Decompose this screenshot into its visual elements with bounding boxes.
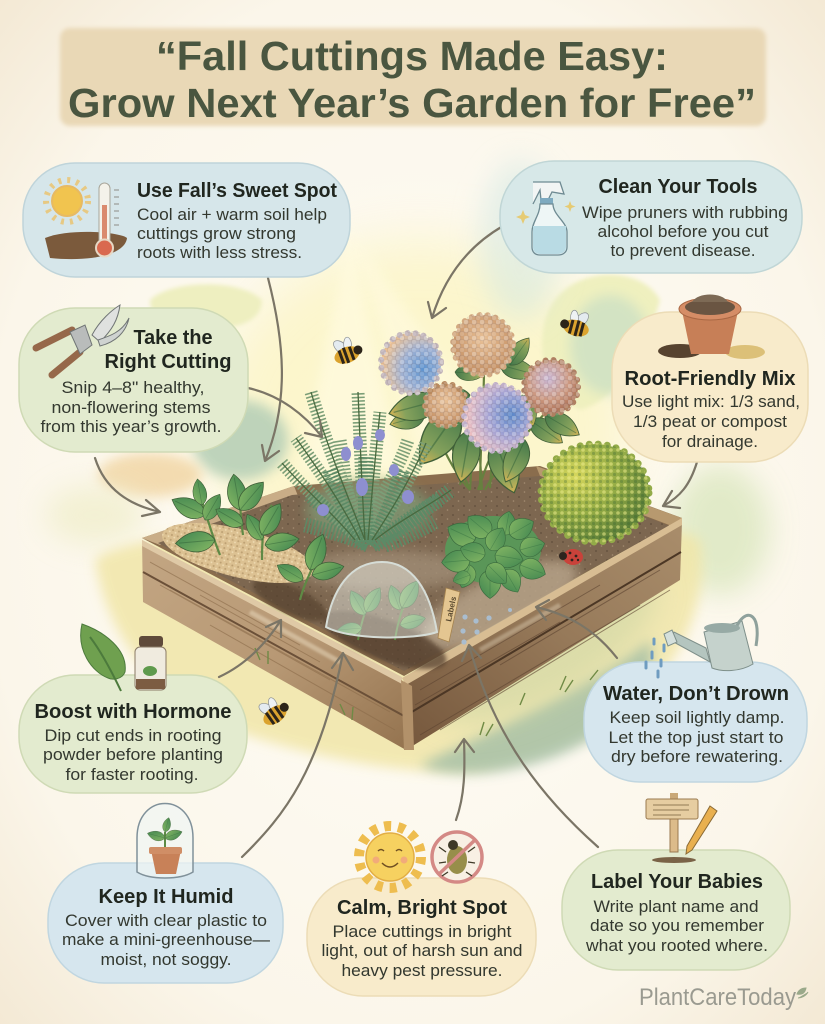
body text: alcohol before you cut [598, 222, 769, 241]
body text: Use light mix: 1/3 sand, [622, 392, 800, 411]
body text: Wipe pruners with rubbing [582, 203, 788, 222]
panel: keep it humid [48, 804, 283, 983]
body text [40, 378, 222, 436]
heading [104, 326, 232, 373]
body text: moist, not soggy. [100, 950, 232, 969]
title banner [60, 28, 766, 126]
heading: Clean Your Tools [598, 175, 758, 198]
body text: to prevent disease. [610, 241, 756, 260]
body text [322, 922, 522, 980]
hydrangea blooms [379, 313, 580, 453]
heading: Keep It Humid [98, 885, 234, 908]
logo: PlantCareToday: PlantCareToday [639, 984, 796, 1011]
panel: water, don't drown [584, 615, 807, 782]
icon: sun and thermometer in soil [45, 180, 127, 259]
heading: Label Your Babies [591, 870, 763, 893]
body text: cuttings grow strong [137, 224, 296, 243]
icon: smiling sun [359, 826, 421, 888]
body text: Write plant name and [594, 897, 758, 916]
bee 2 [558, 305, 594, 339]
front right wall [401, 518, 682, 750]
body text: 1/3 peat or compost [633, 412, 787, 431]
body text: Let the top just start to [608, 728, 784, 747]
body text [585, 897, 768, 955]
back rails [142, 466, 682, 676]
body text: dry before rewatering. [611, 747, 783, 766]
arrows [95, 226, 697, 857]
panel: calm, bright spot [307, 826, 536, 996]
body text: from this year’s growth. [40, 417, 222, 436]
bee 3 [253, 690, 293, 729]
body text: light, out of harsh sun and [322, 941, 522, 960]
body text: make a mini-greenhouse— [62, 930, 270, 949]
body text [608, 708, 784, 766]
plant label stake: Labels [444, 595, 458, 622]
title text [68, 33, 756, 126]
hydrangea plant [379, 313, 584, 498]
basil plant [441, 508, 549, 598]
body text: Keep soil lightly damp. [610, 708, 784, 727]
hydrangea foliage [386, 333, 584, 498]
body text [43, 726, 223, 784]
icon: wooden sign and pencil [646, 793, 717, 863]
heading: Root-Friendly Mix [624, 367, 796, 390]
boxwood shrub [540, 443, 650, 543]
body text: Dip cut ends in rooting [44, 726, 222, 745]
body text: what you rooted where. [585, 936, 768, 955]
panel: root-friendly mix [612, 294, 808, 462]
heading: Use Fall’s Sweet Spot [137, 179, 337, 202]
heading: Water, Don’t Drown [603, 682, 789, 705]
heading: Boost with Hormone [34, 700, 232, 723]
front left wall [142, 540, 406, 750]
body text: date so you remember [590, 916, 764, 935]
sand patch [157, 511, 319, 595]
body text: Snip 4–8" healthy, [62, 378, 204, 397]
raised garden bed [142, 466, 682, 750]
body text [62, 911, 270, 969]
grass tufts [255, 648, 598, 736]
body text [582, 203, 788, 260]
watercolor garden wash [45, 160, 770, 774]
body text: for faster rooting. [66, 765, 198, 784]
lavender blooms [317, 429, 414, 516]
panel: use fall's sweet spot [23, 163, 350, 277]
body text: Place cuttings in bright [332, 922, 512, 941]
plastic dome with seedlings [317, 562, 453, 681]
soil [158, 476, 670, 671]
icon: no pests symbol [432, 832, 482, 882]
water droplets [460, 608, 512, 645]
icon: spray bottle [516, 182, 576, 255]
icon: terracotta pot with soil [658, 294, 765, 359]
ladybug [559, 549, 583, 565]
panel: take the right cutting [19, 305, 248, 452]
title text: “Fall Cuttings Made Easy: [156, 33, 668, 79]
body text: heavy pest pressure. [342, 961, 502, 980]
body text [137, 205, 327, 262]
panel: label your babies [562, 793, 790, 970]
seedlings in sand [168, 473, 346, 600]
panel: boost with hormone [19, 624, 247, 793]
body text: roots with less stress. [137, 243, 302, 262]
body text: powder before planting [43, 745, 223, 764]
plant label stake [438, 588, 460, 642]
title text: Grow Next Year’s Garden for Free” [68, 80, 756, 126]
heading: Right Cutting [104, 350, 232, 373]
heading: Take the [134, 326, 212, 349]
icon: mini greenhouse dome [137, 804, 193, 878]
hydrangea stems [418, 370, 548, 490]
heading: Calm, Bright Spot [337, 896, 507, 919]
body text: non-flowering stems [52, 398, 210, 417]
body text [622, 392, 800, 451]
icon: leaf and rooting powder jar [81, 624, 166, 691]
bee 1 [328, 331, 365, 367]
rosemary plant [282, 392, 451, 545]
icon: watering can [646, 615, 757, 677]
body text: Cover with clear plastic to [65, 911, 267, 930]
panel: clean your tools [500, 161, 802, 273]
body text: Cool air + warm soil help [137, 205, 327, 224]
body text: for drainage. [662, 432, 758, 451]
icon: pruners [36, 305, 129, 375]
